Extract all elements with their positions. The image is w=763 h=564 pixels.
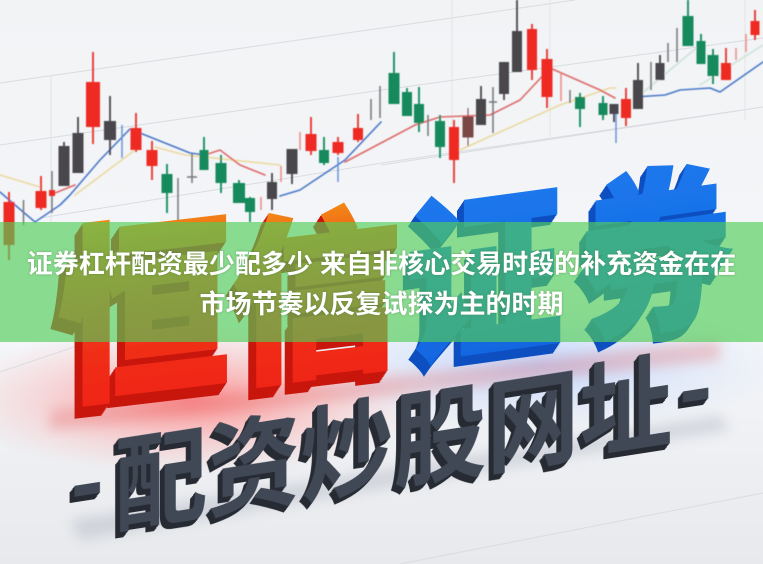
3D heading 恒信: 恒 xyxy=(58,151,230,445)
shadow beneath big letters xyxy=(50,340,720,430)
3D heading 恒信 xyxy=(58,144,401,445)
3D heading 证券 xyxy=(406,104,732,404)
3D heading 恒信: 信 xyxy=(232,144,401,424)
headline text: 市场节奏以反复试探为主的时期 xyxy=(199,289,564,319)
3D sub-heading -配资炒股网址-: - xyxy=(678,302,713,458)
red candles xyxy=(4,10,760,260)
candlestick chart xyxy=(0,0,763,260)
soft shadow under sub-heading xyxy=(70,415,730,540)
3D heading 证券: 证 xyxy=(406,124,563,404)
headline text: 证券杠杆配资最少配多少 来自非核心交易时段的补充资金在在 xyxy=(27,249,736,279)
3D sub-heading -配资炒股网址-: - xyxy=(70,396,104,552)
green banner xyxy=(0,222,763,342)
3D heading 证券: 券 xyxy=(580,104,732,379)
3D sub-heading -配资炒股网址-: 配资炒股网址 xyxy=(114,317,672,555)
headline text xyxy=(27,249,736,319)
dark candles xyxy=(58,0,664,210)
thin wicks xyxy=(24,28,746,225)
moving average lines xyxy=(0,45,763,222)
green candles xyxy=(162,0,718,222)
